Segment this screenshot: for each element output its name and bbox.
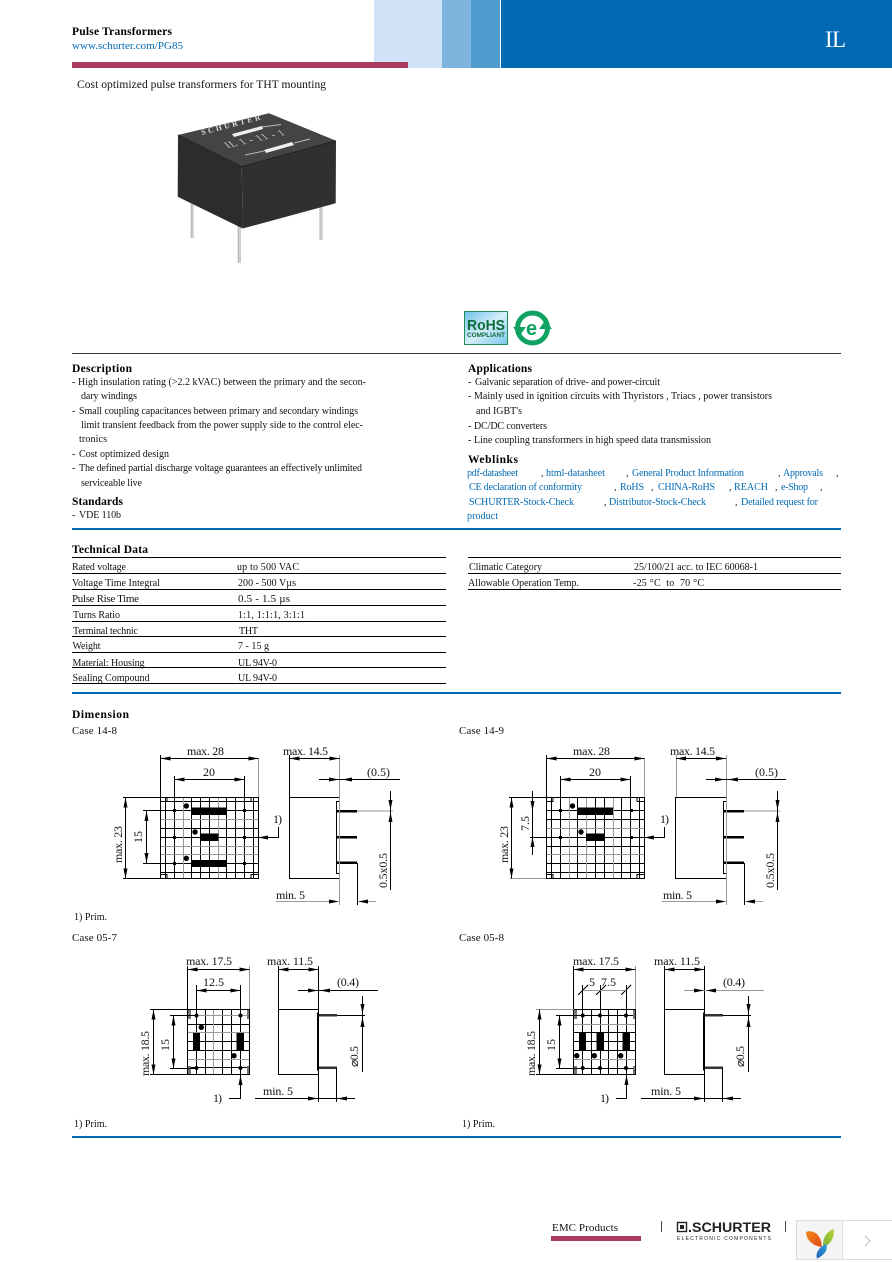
side view — [676, 798, 744, 878]
table: technical data left: UL 94V-0 — [238, 673, 277, 684]
certification logo: China RoHS e: e — [526, 318, 537, 340]
header band — [72, 0, 892, 68]
description bullet list: - — [72, 406, 75, 417]
side view dimensions — [255, 954, 378, 1102]
heading: Weblinks: Weblinks — [468, 454, 519, 466]
side view dimensions: 0.5x0.5 — [376, 853, 390, 888]
weblink list — [467, 468, 838, 522]
side view dimensions: max. 14.5 — [283, 744, 328, 758]
footer: Schurter logo: .SCHURTER — [688, 1220, 771, 1235]
table: technical data left: THT — [239, 626, 258, 637]
side view — [290, 798, 357, 878]
front view dimensions: 7.5 — [601, 975, 616, 989]
weblink list: Distributor-Stock-Check — [609, 497, 706, 508]
table: technical data left: 7 - 15 g — [238, 641, 269, 652]
applications bullet list: Line coupling transformers in high speed data transmission — [474, 435, 711, 446]
side view dimensions: (0.5) — [367, 765, 390, 779]
weblink list: CE declaration of conformity — [469, 482, 582, 493]
description bullet list: Small coupling capacitances between primary and secondary windings — [79, 406, 358, 417]
side view dimensions: ⌀0.5 — [347, 1046, 361, 1067]
weblink list: General Product Information — [632, 468, 744, 479]
side view dimensions: max. 11.5 — [267, 954, 313, 968]
side view dimensions: min. 5 — [263, 1084, 293, 1098]
side view — [664, 1010, 723, 1074]
weblink list: Detailed request for — [741, 497, 819, 508]
weblink list: e-Shop — [781, 482, 808, 493]
side view dimensions: max. 14.5 — [670, 744, 715, 758]
front view dimensions — [524, 954, 636, 1105]
weblink list: , — [735, 497, 738, 508]
weblink list: Approvals — [783, 468, 823, 479]
weblink list: html-datasheet — [546, 468, 605, 479]
weblink list: , — [541, 468, 544, 479]
table: technical data left: UL 94V-0 — [238, 658, 277, 669]
table: technical data right: Allowable Operation Temp. — [468, 578, 579, 589]
weblink list: SCHURTER-Stock-Check — [469, 497, 574, 508]
standards item: VDE 110b — [79, 510, 121, 521]
front view dimensions: 7.5 — [518, 816, 532, 831]
subtitle: Cost optimized pulse transformers for THT mounting — [77, 79, 326, 91]
drawing: case 14-9 — [459, 725, 786, 905]
product photo: transformer — [178, 113, 336, 263]
front view dimensions — [138, 954, 250, 1105]
applications bullet list: Mainly used in ignition circuits with Thyristors , Triacs , power transistors — [474, 391, 772, 402]
front view dimensions: 15 — [544, 1039, 558, 1051]
panel: standards — [72, 496, 124, 521]
case label: Case 05-7 — [72, 932, 118, 944]
front view dimensions: max. 17.5 — [573, 954, 619, 968]
side view dimensions: min. 5 — [651, 1084, 681, 1098]
table: technical data left: Turns Ratio — [73, 610, 120, 621]
description bullet list: limit transient feedback from the power supply side to the control elec- — [81, 420, 363, 431]
panel: weblinks — [467, 454, 838, 522]
applications bullet list — [468, 377, 772, 446]
front view dimensions: 12.5 — [203, 975, 224, 989]
description bullet list: Cost optimized design — [79, 449, 169, 460]
series link: www.schurter.com/PG85 — [72, 40, 184, 52]
applications bullet list: DC/DC converters — [474, 421, 547, 432]
footnote: 1) Prim. — [74, 912, 107, 923]
front view dimensions: max. 18.5 — [524, 1031, 538, 1076]
front view dimensions: max. 28 — [573, 744, 610, 758]
table: technical data left: Terminal technic — [73, 626, 139, 637]
front view dimensions: max. 28 — [187, 744, 224, 758]
side view dimensions: max. 11.5 — [654, 954, 700, 968]
weblink list: REACH — [734, 482, 768, 493]
side view dimensions: min. 5 — [276, 888, 305, 902]
product photo: transformer: SCHURTER — [200, 113, 262, 137]
weblink list: , — [820, 482, 822, 493]
heading: Standards: Standards — [72, 496, 124, 508]
table: technical data left: Voltage Time Integral — [72, 578, 160, 589]
weblink list: , — [626, 468, 628, 479]
footer: Schurter logo — [677, 1220, 772, 1242]
applications bullet list: and IGBT's — [476, 406, 522, 417]
table: technical data left — [72, 558, 446, 684]
table: technical data left: Sealing Compound — [72, 673, 150, 684]
description bullet list: serviceable live — [81, 478, 143, 489]
drawing: case 05-8 — [459, 932, 764, 1130]
applications bullet list: - — [468, 391, 471, 402]
front view dimensions: max. 17.5 — [186, 954, 232, 968]
front view — [546, 797, 644, 879]
certification logo: RoHS compliant: COMPLIANT — [467, 333, 505, 339]
side view dimensions: ⌀0.5 — [733, 1046, 747, 1067]
panel: description — [72, 363, 366, 489]
side view dimensions — [276, 744, 400, 905]
description bullet list: The defined partial discharge voltage guarantees an effectively unlimited — [79, 463, 362, 474]
applications bullet list: - — [468, 421, 471, 432]
front view dimensions — [497, 744, 669, 878]
side view dimensions: (0.4) — [723, 975, 745, 989]
description bullet list: dary windings — [81, 391, 137, 402]
description bullet list: High insulation rating (>2.2 kVAC) between the primary and the secon- — [78, 377, 366, 388]
front view dimensions: max. 18.5 — [138, 1031, 152, 1076]
series code: IL — [825, 27, 846, 52]
weblink list: product — [467, 511, 498, 522]
table: technical data right — [468, 558, 841, 590]
certification logo: RoHS compliant: RoHS — [467, 317, 505, 334]
front view — [160, 797, 258, 879]
front view dimensions: max. 23 — [111, 826, 125, 863]
weblink list: , — [775, 482, 778, 493]
heading: Dimension: Dimension — [72, 709, 130, 721]
applications bullet list: - — [468, 435, 471, 446]
table: technical data left: up to 500 VAC — [237, 562, 299, 573]
front view dimensions — [111, 744, 282, 878]
side view dimensions — [662, 744, 786, 905]
side view dimensions: min. 5 — [663, 888, 692, 902]
table: technical data left: Rated voltage — [72, 562, 127, 573]
front view dimensions: 20 — [203, 765, 215, 779]
description bullet list: tronics — [79, 434, 107, 445]
table: technical data left: 200 - 500 Vµs — [238, 578, 296, 589]
weblink list: , — [778, 468, 780, 479]
drawing: case 05-7 — [72, 932, 378, 1130]
weblink list: , — [651, 482, 654, 493]
footer: viewer widget — [796, 1220, 892, 1260]
weblink list: , — [729, 482, 732, 493]
footnote: 1) Prim. — [462, 1119, 495, 1130]
description bullet list: - — [72, 463, 75, 474]
footnote: 1) Prim. — [74, 1119, 107, 1130]
case label: Case 05-8 — [459, 932, 504, 944]
table: technical data left: Pulse Rise Time — [72, 593, 139, 605]
footer: product family: EMC Products — [552, 1222, 618, 1234]
side view dimensions: (0.5) — [755, 765, 778, 779]
case label: Case 14-9 — [459, 725, 504, 737]
product photo: transformer: IL 1 - 11 - 1 — [222, 128, 288, 150]
drawing: case 14-8 — [72, 725, 400, 923]
front view dimensions: 1) — [273, 812, 282, 826]
table: technical data left: 0.5 - 1.5 µs — [238, 593, 290, 605]
icon: leaf logo — [806, 1229, 834, 1258]
standards item: - — [72, 510, 75, 521]
title: Pulse Transformers: Pulse Transformers — [72, 26, 173, 38]
side view dimensions: 0.5x0.5 — [763, 853, 777, 888]
front view dimensions: 1) — [600, 1091, 609, 1105]
weblink list: , — [836, 468, 838, 479]
certification logo: RoHS compliant — [464, 312, 508, 344]
description bullet list: - — [72, 377, 75, 388]
weblink list: RoHS — [620, 482, 644, 493]
front view dimensions: max. 23 — [497, 826, 511, 863]
front view — [574, 985, 636, 1075]
table: technical data right: 25/100/21 acc. to IEC 60068-1 — [634, 562, 758, 573]
table: technical data left: Weight — [72, 641, 101, 652]
front view dimensions: 15 — [131, 831, 145, 843]
table: technical data left: 1:1, 1:1:1, 3:1:1 — [238, 610, 305, 621]
front view dimensions: 5 — [589, 975, 595, 989]
footer: product family — [551, 1222, 641, 1241]
table: technical data right: -25 °C to 70 °C — [633, 578, 704, 589]
weblink list: , — [604, 497, 606, 508]
heading: Technical Data: Technical Data — [72, 544, 148, 556]
applications bullet list: - — [468, 377, 471, 388]
case label: Case 14-8 — [72, 725, 118, 737]
front view dimensions: 20 — [589, 765, 601, 779]
weblink list: CHINA-RoHS — [658, 482, 715, 493]
side view dimensions: (0.4) — [337, 975, 359, 989]
certification logo: China RoHS e — [513, 313, 552, 343]
description bullet list: - — [72, 449, 75, 460]
front view dimensions: 1) — [213, 1091, 222, 1105]
table: technical data right: Climatic Category — [469, 562, 542, 573]
side view dimensions — [641, 954, 764, 1102]
table: technical data left: Material: Housing — [72, 658, 144, 669]
panel: applications — [468, 363, 772, 446]
icon: chevron — [865, 1236, 870, 1246]
heading: Description: Description — [72, 363, 133, 375]
front view — [188, 985, 250, 1075]
footer: Schurter logo: ELECTRONIC COMPONENTS — [677, 1236, 772, 1242]
heading: Applications: Applications — [468, 363, 533, 375]
weblink list: , — [614, 482, 616, 493]
front view dimensions: 1) — [660, 812, 669, 826]
side view — [278, 1010, 337, 1074]
description bullet list — [72, 377, 366, 489]
applications bullet list: Galvanic separation of drive- and power-circuit — [475, 377, 660, 388]
weblink list: pdf-datasheet — [467, 468, 518, 479]
front view dimensions: 15 — [158, 1039, 172, 1051]
